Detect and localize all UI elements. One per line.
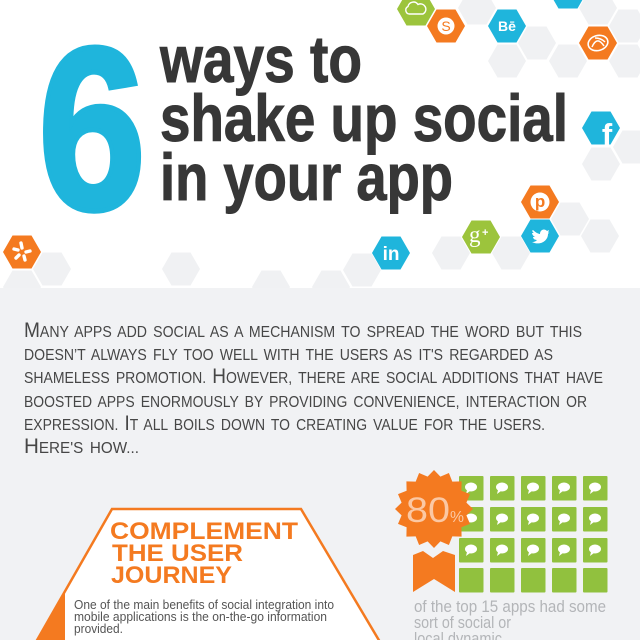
- icon: cloud: [397, 0, 435, 26]
- background hexagon pattern: [3, 0, 640, 304]
- intro text block: [24, 319, 603, 458]
- chart caption: sort of social or: [414, 613, 511, 632]
- speech bubbles: [465, 482, 601, 556]
- icon: pinterest: [521, 186, 559, 218]
- icon: pinterest: p: [535, 192, 545, 211]
- intro text block: BOOSTED APPS ENORMOUSLY BY PROVIDING CONVENIENCE, INTERACTION OR: [24, 394, 587, 411]
- icon: creative cloud: [579, 26, 617, 60]
- badge: 80% award: [395, 470, 473, 592]
- panel body text: provided.: [74, 622, 123, 636]
- intro text block: DOESN’T ALWAYS FLY TOO WELL WITH THE USERS AS IT'S REGARDED AS: [24, 347, 553, 364]
- intro text block: MANY APPS ADD SOCIAL AS A MECHANISM TO SPREAD THE WORD BUT THIS: [24, 319, 582, 342]
- panel body text: One of the main benefits of social integration into: [74, 598, 334, 612]
- panel body text: mobile applications is the on-the-go information: [74, 610, 327, 624]
- badge rosette: [395, 470, 473, 548]
- badge value: [406, 491, 464, 530]
- chart caption: of the top 15 apps had some: [414, 597, 606, 616]
- icon: yelp: [3, 236, 41, 268]
- panel heading: JOURNEY: [111, 562, 232, 589]
- icon: facebook: [582, 112, 620, 152]
- title: in your app: [160, 140, 453, 214]
- icon: top blue hexagon: [549, 0, 587, 8]
- icon: twitter: [521, 220, 559, 252]
- panel heading: COMPLEMENT: [110, 518, 298, 545]
- panel corner accent: [36, 593, 65, 640]
- title: [159, 22, 568, 214]
- icon: behance: [488, 10, 526, 42]
- badge value: 80: [406, 491, 450, 530]
- intro text block: EXPRESSION. IT ALL BOILS DOWN TO CREATING VALUE FOR THE USERS.: [24, 412, 545, 435]
- badge ribbon: [413, 551, 455, 592]
- title: shake up social: [160, 81, 568, 155]
- chart: 80% of top 15 apps grid: [459, 476, 608, 592]
- icon: google plus: g: [469, 222, 481, 247]
- icon: facebook: f: [602, 117, 613, 152]
- panel: complement the user journey: [36, 509, 380, 640]
- grid squares: [459, 476, 608, 592]
- icon: linkedin: in: [383, 244, 399, 265]
- icon: linkedin: [372, 236, 410, 270]
- icon: skype: S: [441, 18, 451, 34]
- icon: skype: [427, 10, 465, 42]
- badge value: %: [450, 509, 464, 526]
- panel heading: THE USER: [112, 540, 243, 567]
- title: ways to: [159, 22, 362, 96]
- panel heading: [110, 518, 298, 589]
- icon: google plus: [462, 220, 500, 254]
- icon: behance: Bē: [498, 18, 516, 34]
- title numeral: 6: [38, 0, 146, 259]
- chart caption: [414, 597, 606, 640]
- intro text block: HERE'S HOW...: [24, 435, 139, 458]
- icon: google plus: +: [482, 227, 488, 239]
- panel body text: [74, 598, 334, 636]
- intro text block: SHAMELESS PROMOTION. HOWEVER, THERE ARE SOCIAL ADDITIONS THAT HAVE: [24, 365, 603, 388]
- lower panel background: [0, 288, 640, 640]
